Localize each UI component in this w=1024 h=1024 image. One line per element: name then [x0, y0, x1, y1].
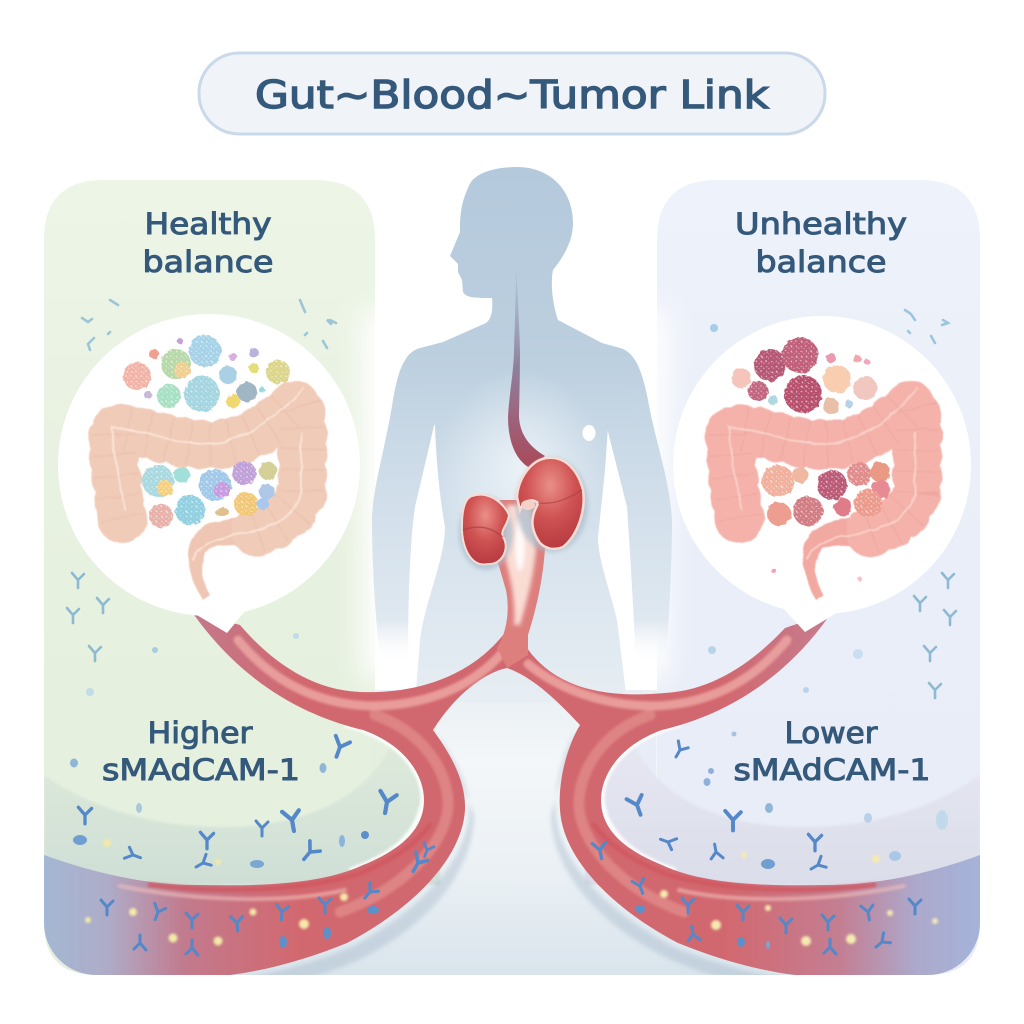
white spot — [582, 425, 596, 441]
white rim right — [601, 723, 680, 872]
right bubble pointer — [780, 605, 850, 632]
heading: unhealthy balance: Unhealthy — [735, 207, 907, 241]
right vessel — [507, 612, 980, 975]
right lobe shadow — [516, 458, 588, 552]
colon scallops — [113, 402, 303, 533]
colon body — [730, 402, 918, 533]
right lobe — [517, 458, 584, 549]
left bubble pointer — [180, 605, 250, 633]
colon tail — [188, 514, 265, 600]
panel: healthy balance background — [44, 180, 375, 975]
left vessel — [44, 612, 522, 975]
right magnifier bubble — [673, 316, 971, 632]
lower pool: unhealthy — [585, 777, 980, 885]
human body silhouette — [372, 167, 672, 702]
panel edge fade left — [362, 310, 472, 680]
label: higher sMAdCAM-1: Higher — [148, 716, 253, 750]
unhealthy microbes — [731, 337, 890, 581]
title text: Gut~Blood~Tumor Link — [255, 73, 769, 117]
healthy microbes — [123, 335, 290, 528]
stem white streak — [515, 519, 525, 571]
centre background — [225, 690, 800, 980]
label: higher sMAdCAM-1 — [102, 716, 300, 787]
label: lower sMAdCAM-1 — [734, 716, 930, 787]
heading: healthy balance: Healthy — [144, 207, 272, 241]
stomach and stem — [459, 458, 588, 668]
faded particles: unhealthy upper — [708, 310, 956, 698]
healthy colon — [112, 388, 304, 600]
colon inner line — [729, 388, 918, 560]
heading: healthy balance: balance — [142, 245, 274, 279]
label: lower sMAdCAM-1: sMAdCAM-1 — [734, 753, 930, 787]
colon scallops — [730, 402, 918, 533]
stem base — [488, 500, 545, 668]
title pill — [199, 53, 825, 134]
stem light core — [503, 505, 536, 625]
right lobe fold — [538, 490, 582, 503]
left lobe shadow — [459, 496, 513, 570]
small tissue — [521, 500, 535, 510]
microbe texture — [123, 335, 290, 528]
blood vessel network — [44, 612, 980, 979]
colon folds — [113, 402, 303, 533]
faded particles: healthy upper — [67, 300, 336, 696]
left lobe — [462, 495, 509, 564]
left lobe fold — [463, 527, 503, 537]
antibodies: healthy gut side — [70, 736, 434, 955]
unhealthy colon — [729, 388, 918, 600]
left magnifier bubble — [58, 314, 360, 633]
white rim left — [345, 723, 424, 872]
heading: healthy balance — [142, 207, 274, 279]
lower pool: healthy — [44, 754, 440, 886]
arms — [372, 348, 672, 665]
colon body — [113, 402, 303, 533]
colon folds — [730, 402, 918, 533]
vessel shadows — [256, 735, 768, 975]
microbe texture — [748, 337, 882, 526]
panel edge fade right — [560, 310, 668, 680]
belly glow — [435, 370, 605, 570]
head and torso — [415, 167, 628, 702]
colon inner line — [112, 388, 304, 560]
esophagus — [508, 268, 545, 468]
inner loop fill left — [370, 705, 436, 875]
panel: unhealthy balance background — [657, 180, 980, 975]
heading: unhealthy balance: balance — [756, 245, 886, 279]
colon tail — [803, 514, 880, 600]
label: lower sMAdCAM-1: Lower — [784, 716, 878, 750]
label: higher sMAdCAM-1: sMAdCAM-1 — [102, 753, 300, 787]
vessel highlights — [120, 640, 904, 912]
antibodies: unhealthy gut side — [592, 732, 948, 954]
heading: unhealthy balance — [735, 207, 907, 279]
inner loop fill right — [590, 705, 656, 875]
